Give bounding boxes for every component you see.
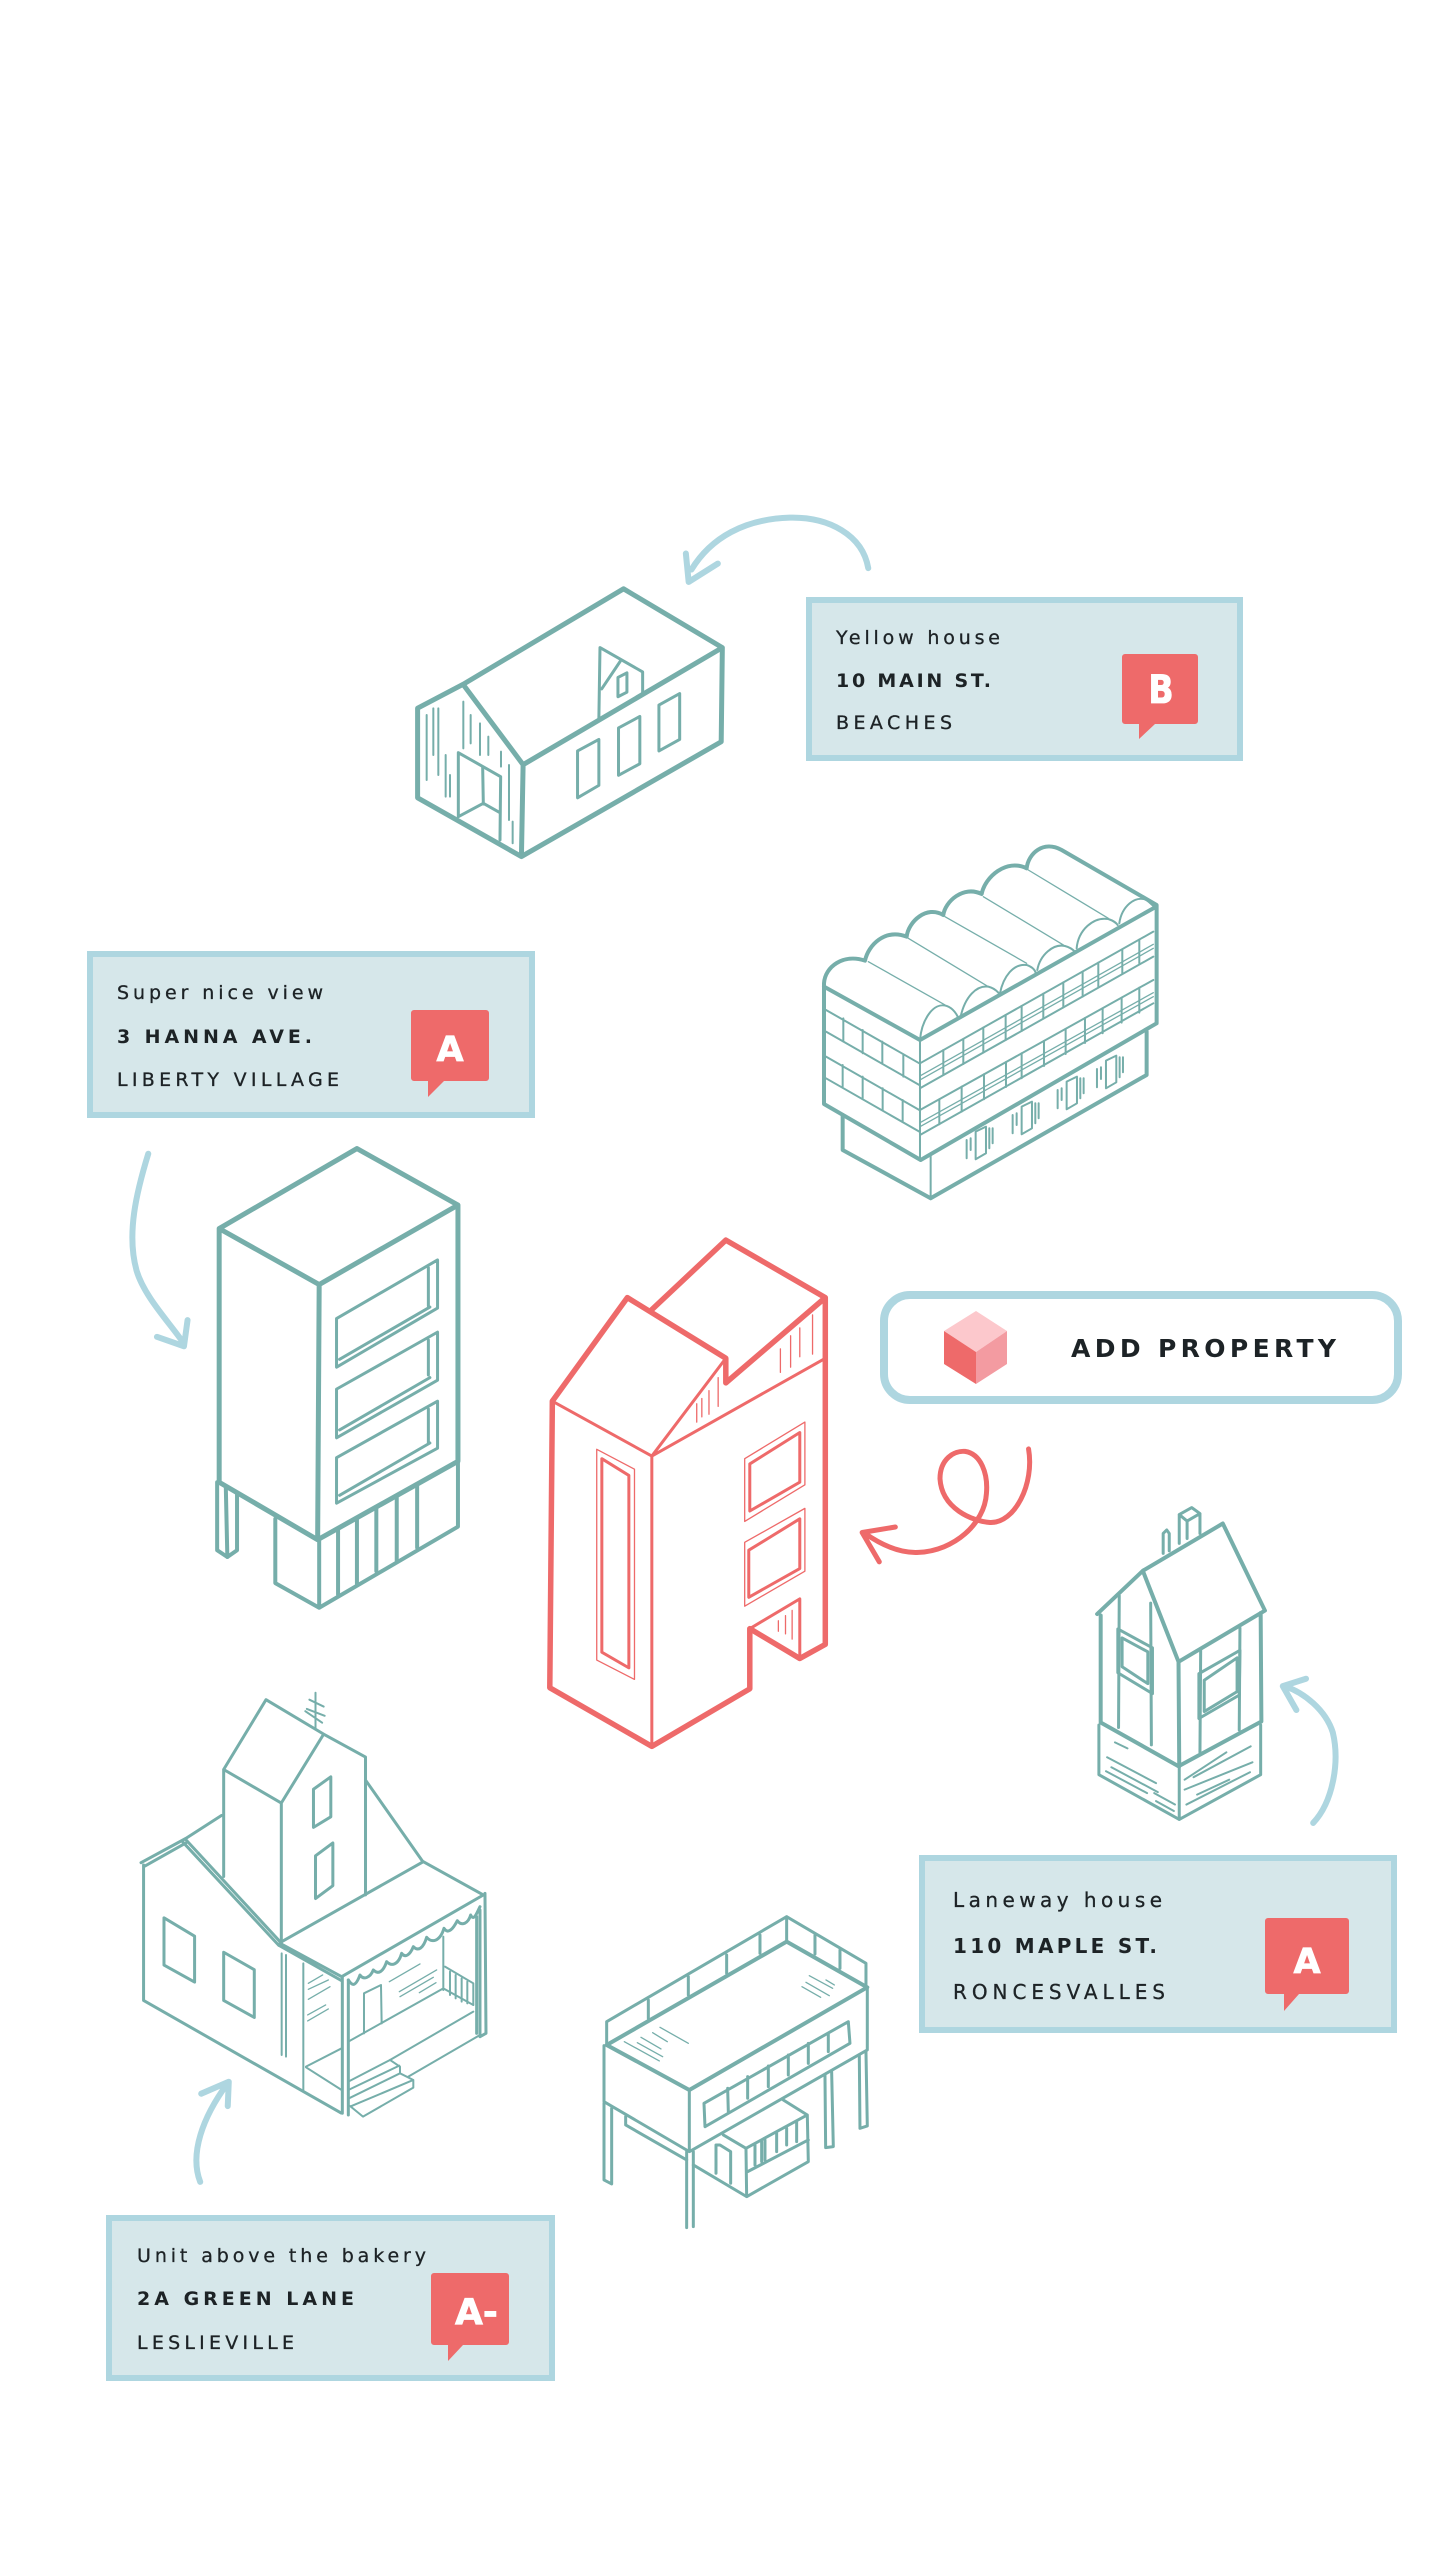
laneway windows [1118,1629,1240,1718]
callout panel [90,954,532,1115]
button label: ADD PROPERTY [1071,1334,1337,1363]
barrel-roof outline [824,847,1157,1160]
arrow: to yellow house [686,518,868,582]
callout text [117,982,339,1091]
coral hatching [697,1315,813,1639]
grade badge A [1265,1918,1349,2011]
arrow: looping coral arrow [862,1449,1030,1562]
door [458,753,501,840]
left window bands [826,1010,919,1132]
tower windows [337,1260,438,1503]
small windows [967,1056,1123,1159]
window strip [704,2022,850,2127]
stilts body [604,1987,867,2152]
grade badge A- [431,2273,509,2361]
porch railing [445,1967,473,2005]
grade badge A: A [1293,1942,1321,1982]
base corner [930,1155,932,1198]
tower base and columns [217,1461,458,1608]
callout text: RONCESVALLES [953,1980,1165,2004]
building: featured coral house [550,1240,825,1746]
callout text: Laneway house [953,1888,1162,1912]
laneway foundation [1099,1725,1261,1819]
grade badge A-: A- [455,2292,498,2333]
callout: bakery unit [109,2218,552,2378]
annex [626,2100,808,2197]
laneway boards [1119,1596,1240,1752]
upper mullions [943,940,1139,1075]
porch roof [280,1862,483,1981]
right mid rails [920,944,1153,1127]
callout: yellow house [809,600,1240,758]
roof barrels [868,870,1108,1005]
callout text: 2A GREEN LANE [137,2288,354,2310]
callout text: 10 MAIN ST. [836,670,991,692]
siding hatch [427,702,513,843]
callout text: Unit above the bakery [137,2245,426,2267]
coral outline [550,1240,825,1746]
building: tall tower [217,1149,458,1608]
building: barrel-roof block [824,847,1157,1198]
callout: laneway house [922,1858,1394,2030]
stilts roof [607,1942,867,2090]
callout text: Yellow house [835,627,1000,649]
laneway chimneys [1163,1508,1200,1553]
arrow: to tower [132,1154,188,1346]
arrow: to laneway house [1283,1679,1336,1823]
bakery windows [164,1777,333,2017]
callout panel [109,2218,552,2378]
bakery hatch [308,1964,437,2021]
coral right windows [745,1422,805,1606]
callout text: LIBERTY VILLAGE [117,1069,339,1091]
lower mullions [939,988,1139,1124]
callout text [835,627,1000,734]
coral ridges [552,1358,825,1746]
porch steps [348,2060,413,2117]
grade badge B [1122,654,1198,739]
stilts legs [604,2052,867,2228]
callout: Hanna Ave [90,954,532,1115]
laneway roof and walls [1097,1524,1265,1766]
foundation hatch [1106,1742,1252,1811]
coral left window [597,1449,634,1679]
porch door [364,1985,382,2033]
porch columns [342,1893,486,2115]
callout panel [922,1858,1394,2030]
tower body [219,1149,458,1540]
callout text: BEACHES [836,712,952,734]
callout text: 110 MAPLE ST. [953,1934,1157,1958]
right window bands [920,932,1153,1135]
grade badge B: B [1148,666,1174,713]
callout text: 3 HANNA AVE. [117,1026,312,1048]
roof arcs [920,899,1155,1160]
building: laneway house [1097,1508,1265,1819]
callout text: Super nice view [117,982,323,1004]
grade badge A [411,1010,489,1097]
building: bakery house [141,1693,486,2117]
building: stilts modern house [604,1917,867,2228]
arrow: to bakery house [196,2082,229,2182]
antenna [305,1693,325,1730]
callout text [953,1888,1165,2004]
dormer [599,648,643,719]
icon: cube [944,1311,1007,1384]
button panel [884,1295,1398,1400]
bakery tower [224,1700,366,1941]
callout panel [809,600,1240,758]
grade badge A: A [436,1030,464,1070]
building: yellow house [418,589,722,857]
coral right windows inner [749,1433,800,1597]
side windows [578,694,680,798]
yellow house outline [418,589,722,857]
callout text [137,2245,426,2354]
callout text: LESLIEVILLE [137,2332,294,2354]
porch back wall and floor [348,1937,480,2082]
porch side wall [282,1953,342,2090]
bakery main walls [141,1780,423,2113]
parapet [607,1917,866,2043]
button: add property [884,1295,1398,1400]
porch awning [348,1907,480,1984]
base [843,1032,1147,1198]
coral left window inner [602,1459,629,1668]
roof hatch [624,1976,834,2061]
